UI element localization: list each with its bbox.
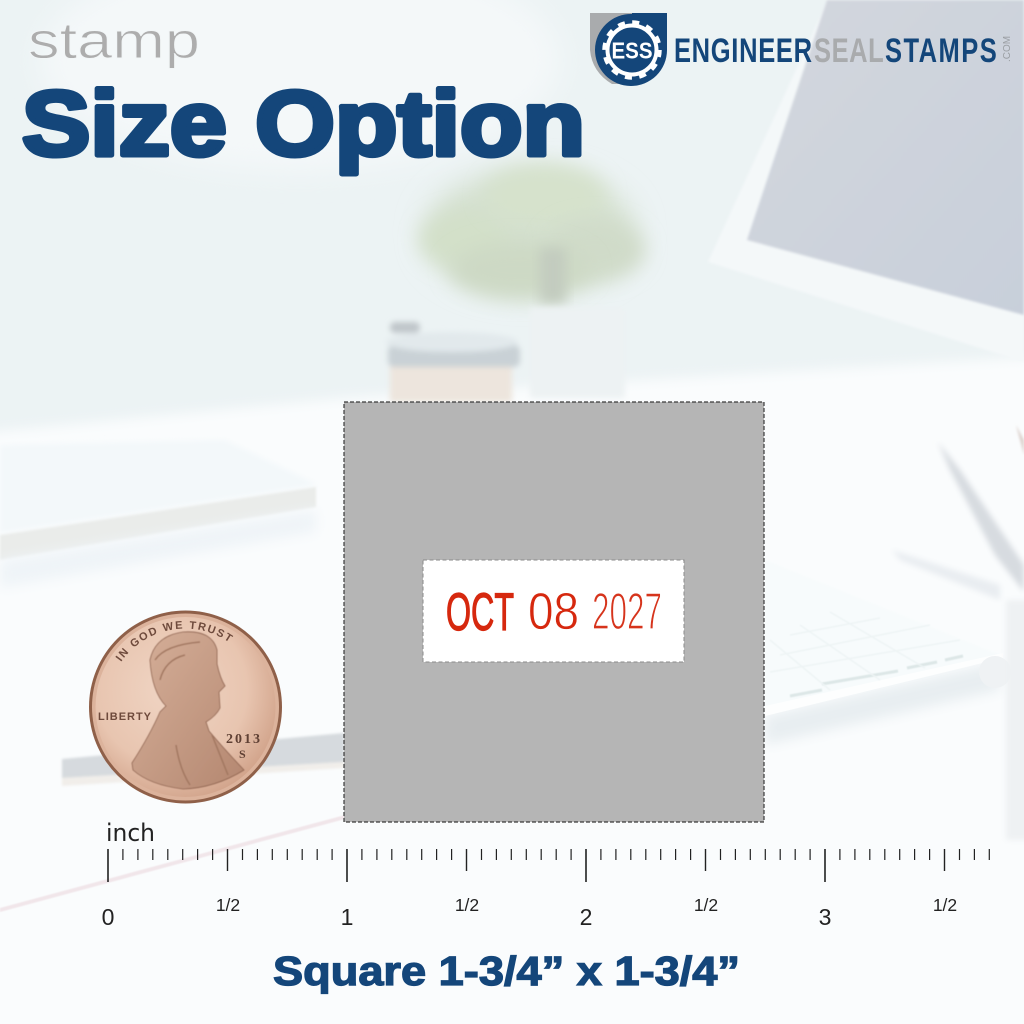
notebook: [0, 440, 318, 588]
date: month: OCT: [446, 583, 514, 642]
ruler: [102, 819, 989, 930]
logo wordmark: [674, 33, 1013, 70]
ruler numbers: 0: [102, 904, 114, 930]
pen behind coin: [62, 733, 344, 786]
logo emblem: ESS: [612, 38, 652, 64]
size caption: Square 1-3/4” x 1-3/4”: [273, 948, 740, 994]
logo wordmark: STAMPS: [885, 33, 997, 70]
pen holder: [1006, 600, 1024, 840]
keyboard: [765, 560, 1011, 745]
coin: liberty: LIBERTY: [98, 711, 152, 723]
plant pot: [530, 308, 625, 398]
logo: [590, 13, 1013, 86]
lincoln portrait: [132, 632, 244, 789]
logo wordmark: ENGINEER: [674, 33, 812, 70]
ruler ticks: [108, 849, 989, 882]
pencils: [892, 425, 1024, 600]
ruler numbers: 2: [580, 904, 592, 930]
plant: [420, 165, 645, 303]
date: day: 08: [528, 583, 579, 641]
stamp impression area: [344, 402, 764, 822]
coin: mint mark: S: [239, 747, 246, 761]
date text box: [423, 560, 684, 662]
ruler numbers: 1/2: [455, 895, 479, 915]
monitor: [708, 0, 1024, 362]
ruler numbers: 1/2: [933, 895, 957, 915]
ruler numbers: 1: [341, 904, 353, 930]
logo wordmark: .COM: [1002, 36, 1013, 62]
ruler numbers: 1/2: [694, 895, 718, 915]
penny: [89, 610, 282, 804]
stamp label: stamp: [28, 12, 200, 69]
paper edge: [0, 815, 345, 912]
ruler numbers: 1/2: [216, 895, 240, 915]
ruler unit: inch: [106, 819, 155, 847]
logo emblem: [590, 13, 667, 86]
coin inscription: IN GOD WE TRUST: [115, 621, 234, 662]
logo wordmark: SEAL: [814, 33, 884, 70]
ruler numbers: [102, 895, 957, 930]
title: Size Option: [22, 73, 585, 175]
coin: date: 2013: [226, 732, 260, 747]
date: year: 2027: [592, 583, 662, 641]
ruler numbers: 3: [819, 904, 831, 930]
coffee cup: [386, 322, 520, 402]
